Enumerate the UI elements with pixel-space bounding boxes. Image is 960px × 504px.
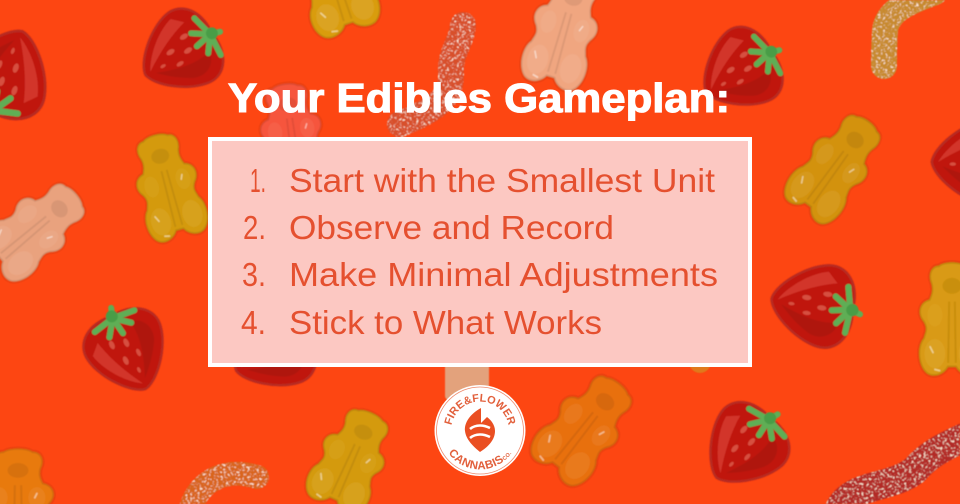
gummy: peach bear left	[0, 182, 86, 284]
logo icon: flame	[465, 408, 495, 452]
step 3: Make Minimal Adjustments	[289, 256, 718, 293]
panel: gameplan list	[210, 139, 750, 365]
step 1: Start with the Smallest Unit	[289, 162, 715, 199]
title: Your Edibles Gameplan:	[228, 75, 730, 121]
gummy: yellow bear left	[134, 132, 208, 244]
gummy: strawberry top left	[142, 6, 225, 88]
gummy: strawberry right edge dark	[930, 128, 960, 196]
step 1: 1.	[250, 162, 266, 199]
gummy: top peach bear	[519, 0, 600, 92]
logo text: top arc: FIRE&FLOWER	[444, 394, 516, 426]
gummy: yellow bear right edge	[919, 262, 960, 376]
step 4: Stick to What Works	[289, 304, 602, 341]
gummy: top yellow bear	[308, 0, 382, 40]
gummy: strawberry right	[770, 264, 864, 350]
gummy: strawberry top right	[702, 25, 784, 106]
gummy: worm tip below panel	[690, 367, 710, 374]
gummy: strawberry lower left	[82, 304, 164, 392]
gummy: sour worm top right	[884, 0, 935, 66]
step 2: 2.	[243, 209, 266, 246]
gummy: strawberry bottom right	[708, 400, 791, 484]
gummy: peach piece above logo	[444, 367, 490, 400]
gummy: bottom left orange bear	[0, 448, 55, 504]
logo: Fire & Flower Cannabis Co. badge	[434, 385, 526, 476]
gummy: strawberry behind panel	[234, 367, 317, 387]
gummy: yellow bear right	[782, 113, 882, 226]
gummy: sour worm bottom left	[190, 474, 257, 504]
gummy: bottom yellow bear	[304, 408, 390, 504]
gummy: sour worm bottom right	[838, 434, 960, 504]
gummy: strawberry left edge	[0, 29, 47, 121]
gummy: red bear behind panel	[258, 82, 323, 137]
step 2: Observe and Record	[289, 209, 614, 246]
gummy: orange bear	[528, 374, 634, 488]
logo text: bottom arc: CANNABISCO.	[450, 450, 512, 470]
step 4: 4.	[241, 304, 266, 341]
gummy: sour worm centre	[400, 25, 463, 124]
step 3: 3.	[242, 256, 266, 293]
